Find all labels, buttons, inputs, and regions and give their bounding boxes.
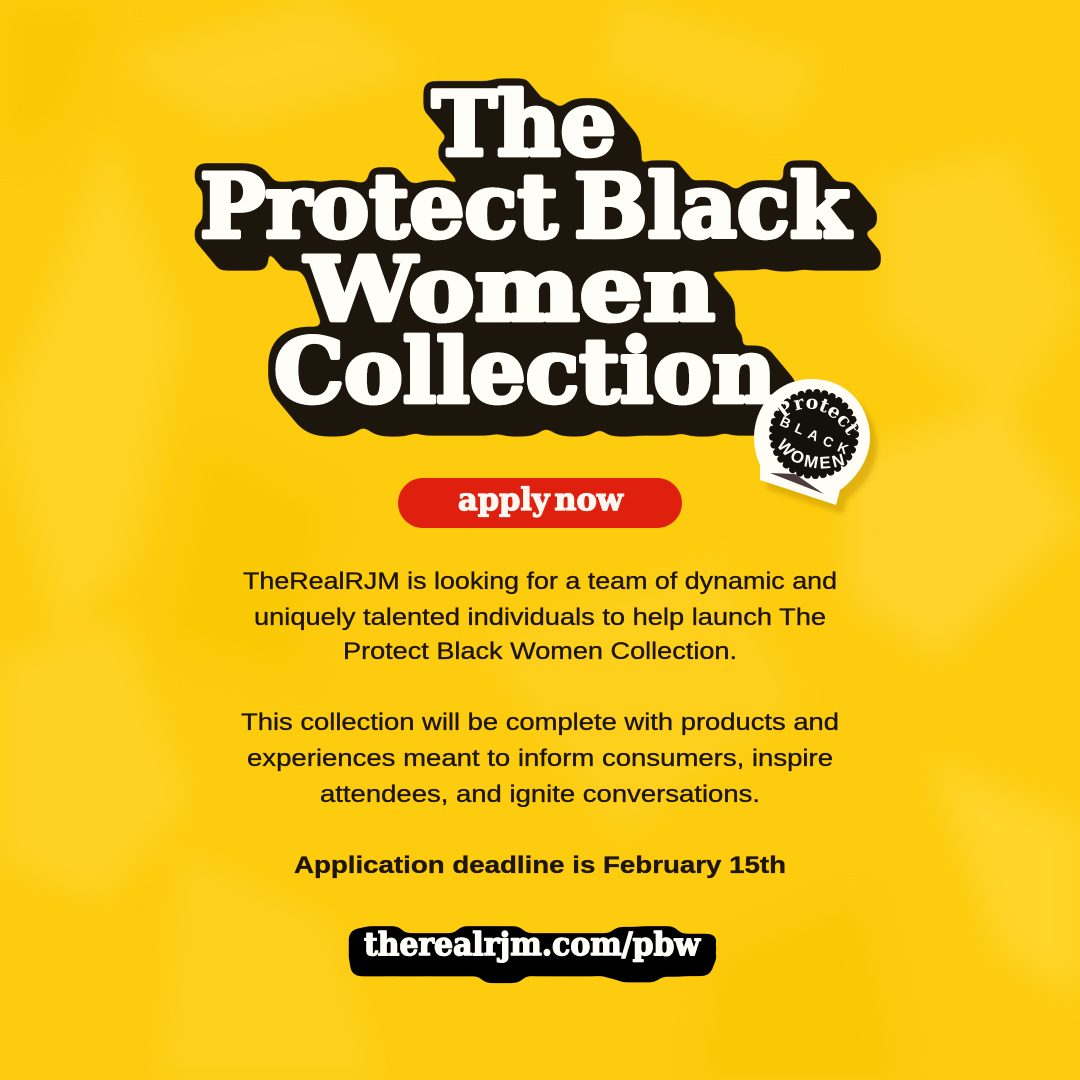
text block: intro paragraph: uniquely talented individuals to help launch The: [254, 604, 826, 631]
title: The Protect Black Women Collection: Protect Black: [200, 154, 852, 258]
text block: intro paragraph: [243, 568, 837, 665]
text block: intro paragraph: Protect Black Women Collection.: [343, 638, 737, 665]
title: The Protect Black Women Collection: The: [432, 72, 616, 176]
sticker stand: [770, 473, 824, 494]
sticker shadow: [761, 388, 877, 514]
text block: collection description: [241, 709, 839, 808]
text block: collection description: experiences meant to inform consumers, inspire: [247, 745, 833, 772]
text block: collection description: This collection will be complete with products and: [241, 709, 839, 736]
button label: apply now: [458, 482, 624, 518]
sticker lettering: Protect: [778, 398, 858, 436]
text: application deadline: Application deadline is February 15th: [294, 852, 786, 879]
sticker lettering: WOMEN: [778, 438, 844, 469]
sticker white backing: [754, 379, 870, 505]
button: apply now: [398, 478, 682, 528]
link: therealrjm.com/pbw: therealrjm.com/pbw: [364, 925, 701, 963]
sticker lettering: BLACK: [778, 413, 856, 460]
title: The Protect Black Women Collection: Women: [304, 237, 715, 341]
sticker dark scalloped circle: [772, 392, 856, 476]
title: The Protect Black Women Collection: [200, 72, 852, 423]
text block: collection description: attendees, and ignite conversations.: [320, 781, 760, 808]
sticker: Protect Black Women badge: [754, 379, 878, 514]
text block: intro paragraph: TheRealRJM is looking for a team of dynamic and: [243, 568, 837, 595]
title: The Protect Black Women Collection: Collection: [274, 319, 776, 423]
sticker lettering: [778, 398, 858, 469]
